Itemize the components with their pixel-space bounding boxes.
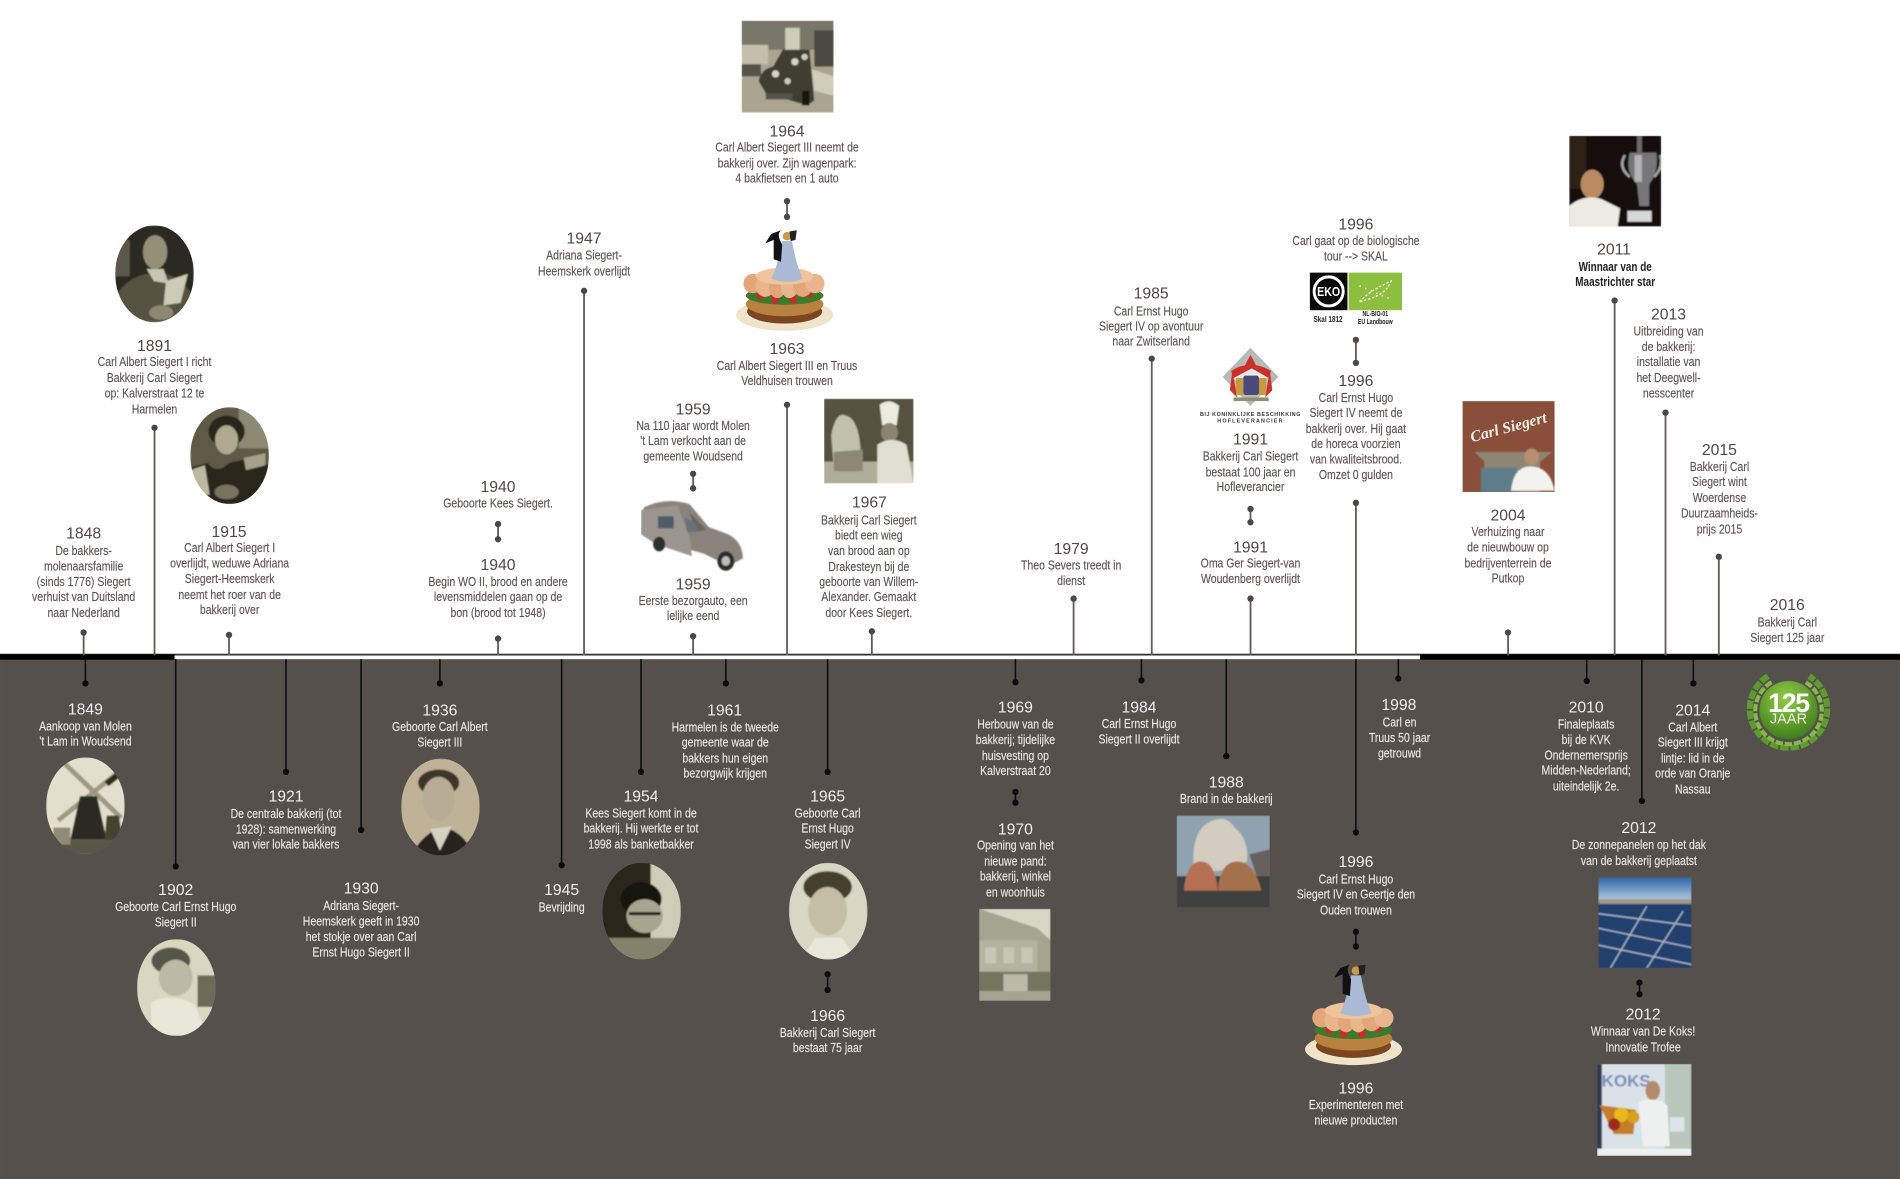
year 1902: 1902 xyxy=(158,882,193,899)
badge: 125 jaar xyxy=(1750,676,1827,748)
description 1930: Adriana Siegert- xyxy=(323,899,399,913)
description 1915: Siegert-Heemskerk xyxy=(185,572,275,586)
stem 2015 xyxy=(1716,554,1722,656)
portrait 1902 xyxy=(137,939,216,1036)
description 1998: Carl en xyxy=(1383,715,1416,729)
stem 1959 xyxy=(690,633,696,656)
year 1940: 1940 xyxy=(481,557,516,574)
stem 1996 xyxy=(1353,659,1359,836)
stem 1849 xyxy=(82,659,89,687)
description 1965: Geboorte Carl xyxy=(795,806,861,820)
stem 1961 xyxy=(723,659,729,687)
year 2012: 2012 xyxy=(1621,820,1656,837)
stem 1891 xyxy=(151,425,158,656)
year 1959: 1959 xyxy=(676,401,711,418)
event: 2013 xyxy=(1634,306,1704,656)
year 1965: 1965 xyxy=(810,789,845,806)
description 1963: Carl Albert Siegert III en Truus xyxy=(717,358,857,373)
laurel wreath xyxy=(1750,676,1827,748)
photo: bakery fire xyxy=(1176,816,1270,908)
description 1959: lelijke eend xyxy=(667,609,719,623)
caption: EU: NL-BIO-01 xyxy=(1363,310,1388,318)
year 2012: 2012 xyxy=(1626,1007,1661,1024)
description 1954: Kees Siegert komt in de xyxy=(585,806,697,820)
stem 2012 xyxy=(1639,659,1645,804)
icon: EU organic leaf xyxy=(1349,273,1402,310)
year 1991: 1991 xyxy=(1233,432,1268,449)
description 1945: Bevrijding xyxy=(539,900,585,914)
description 2010: uiteindelijk 2e. xyxy=(1553,779,1619,793)
stem 1936 xyxy=(437,659,443,687)
description 1940: levensmiddelen gaan op de xyxy=(434,590,562,604)
description 1915: neemt het roer van de xyxy=(178,587,281,602)
year 1996: 1996 xyxy=(1338,854,1374,871)
stem 2010 xyxy=(1584,659,1590,684)
description 1965: Ernst Hugo xyxy=(801,821,854,835)
year 1963: 1963 xyxy=(770,341,805,358)
year 1945: 1945 xyxy=(544,882,579,899)
description 1991: Oma Ger Siegert-van xyxy=(1201,556,1300,570)
portrait 1915 xyxy=(190,407,269,504)
year 1891: 1891 xyxy=(137,338,172,355)
year 1940: 1940 xyxy=(481,479,516,496)
description 1947: Adriana Siegert- xyxy=(546,248,622,262)
description 1969: Kalverstraat 20 xyxy=(980,764,1051,778)
description 2015: Woerdense xyxy=(1693,490,1746,505)
year 1985: 1985 xyxy=(1134,286,1169,303)
year 1936: 1936 xyxy=(422,703,458,720)
description 1996: Carl Ernst Hugo xyxy=(1319,872,1393,886)
connector 1959 xyxy=(690,471,696,491)
year 1991: 1991 xyxy=(1233,540,1268,557)
description 1961: bakkers hun eigen xyxy=(682,751,768,765)
event: 1970 xyxy=(977,821,1055,1001)
description 2013: Uitbreiding van xyxy=(1634,324,1704,338)
event: 2011 xyxy=(1569,136,1661,656)
green disc xyxy=(1759,681,1818,739)
photo: Koks trophy xyxy=(1597,1064,1692,1156)
caption: royal warrant: BIJ KONINKLIJKE BESCHIKKING xyxy=(1200,412,1301,418)
year 1921: 1921 xyxy=(268,789,304,806)
icon: royal crest xyxy=(1223,348,1278,406)
stem 1985 xyxy=(1149,356,1155,656)
description 1967: Drakesteyn bij de xyxy=(828,560,909,574)
photo: new building sign: Carl Siegert xyxy=(1469,409,1549,446)
description 1985: Siegert IV op avontuur xyxy=(1099,319,1203,333)
event: 1979 xyxy=(1021,541,1121,656)
portrait 1965 xyxy=(788,862,868,960)
description 2013: het Deegwell- xyxy=(1636,370,1701,385)
description 1984: Carl Ernst Hugo xyxy=(1102,716,1176,731)
event: 1848 xyxy=(32,526,135,656)
description 1991: Bakkerij Carl Siegert xyxy=(1203,449,1299,463)
year 1967: 1967 xyxy=(852,495,887,512)
stem 1963 xyxy=(784,402,790,656)
caption: EU: EU Landbouw xyxy=(1358,318,1393,326)
photo: baker with cradle xyxy=(824,398,914,484)
description 1991: Woudenberg overlijdt xyxy=(1201,572,1301,586)
description 1891: Bakkerij Carl Siegert xyxy=(107,370,203,385)
stem 1967 xyxy=(869,628,875,656)
stem 2013 xyxy=(1662,409,1669,656)
description 1891: op: Kalverstraat 12 te xyxy=(105,386,204,400)
icon: EKO logo: EKO xyxy=(1317,284,1340,299)
event: 1921 xyxy=(231,659,342,851)
description 1954: 1998 als banketbakker xyxy=(588,837,694,851)
description 2014: Siegert III krijgt xyxy=(1658,735,1728,749)
icon: wedding cake bread xyxy=(736,230,833,331)
description 2004: Verhuizing naar xyxy=(1472,524,1545,539)
stem 2014 xyxy=(1690,659,1697,687)
description 1979: dienst xyxy=(1057,573,1086,588)
event: 1936 xyxy=(392,659,488,855)
photo: chef with trophy xyxy=(1569,136,1662,227)
connector 1940 xyxy=(495,521,501,542)
connector 1996 xyxy=(1353,337,1359,366)
event: 1996 experiment xyxy=(1305,965,1404,1127)
stem 1848 xyxy=(80,629,87,656)
event: 2004 xyxy=(1463,401,1555,656)
description 1969: huisvesting op xyxy=(982,749,1049,763)
description 2010: bij de KVK xyxy=(1562,733,1611,747)
event: 1947 xyxy=(538,231,631,656)
description 1961: Harmelen is de tweede xyxy=(672,720,779,734)
event: 1996 wedding xyxy=(1297,659,1415,950)
description 1848: verhuist van Duitsland xyxy=(32,590,135,604)
event: 2015 xyxy=(1681,442,1758,656)
year 2010: 2010 xyxy=(1569,700,1604,717)
description 1996: Siegert IV neemt de xyxy=(1310,406,1402,420)
description 2010: Midden-Nederland; xyxy=(1542,763,1631,777)
description 2011: Winnaar van de xyxy=(1579,261,1652,274)
description 1936: Siegert III xyxy=(417,735,462,749)
portrait: windmill xyxy=(46,757,125,854)
year 1996: 1996 xyxy=(1338,373,1374,390)
description 1964: bakkerij over. Zijn wagenpark: xyxy=(718,156,856,170)
year 2015: 2015 xyxy=(1702,442,1737,459)
year 1954: 1954 xyxy=(623,789,659,806)
description 1940: Begin WO II, brood en andere xyxy=(428,575,568,589)
description 1954: bakkerij. Hij werkte er tot xyxy=(584,821,699,835)
year 1969: 1969 xyxy=(998,700,1033,717)
description 2004: bedrijventerrein de xyxy=(1465,556,1551,570)
event: 1985 xyxy=(1099,286,1203,656)
event: 1996 overname xyxy=(1306,373,1407,656)
stem 1969 xyxy=(1012,659,1019,685)
description 1985: naar Zwitserland xyxy=(1112,334,1190,348)
dark lower band xyxy=(0,658,1900,1179)
photo: decorated car xyxy=(742,20,834,113)
description 2014: orde van Oranje xyxy=(1655,766,1730,780)
photo: new shop xyxy=(979,908,1050,1001)
year 1998: 1998 xyxy=(1381,697,1417,714)
year 1996: 1996 xyxy=(1338,217,1374,234)
description 1921: van vier lokale bakkers xyxy=(233,837,339,851)
stem 1954 xyxy=(638,659,644,775)
description 1930: het stokje over aan Carl xyxy=(306,930,417,944)
description 1970: Opening van het xyxy=(977,838,1055,852)
caption: hofleverancier: HOFLEVERANCIER xyxy=(1217,419,1284,425)
description 1979: Theo Severs treedt in xyxy=(1021,558,1121,572)
year 1964: 1964 xyxy=(770,123,805,140)
icon: EKO logo xyxy=(1310,273,1347,310)
description 1984: Siegert II overlijdt xyxy=(1099,732,1180,746)
event: 2010 xyxy=(1542,659,1631,793)
description 1996: tour --> SKAL xyxy=(1324,249,1388,263)
description 2014: Carl Albert xyxy=(1668,720,1718,734)
description 1996: Experimenteren met xyxy=(1309,1098,1404,1112)
photo: solar panels xyxy=(1598,877,1692,968)
connector 2012 xyxy=(1636,980,1643,997)
description 1967: biedt een wieg xyxy=(835,528,903,542)
stem 2004 xyxy=(1505,629,1511,656)
description 2016: Siegert 125 jaar xyxy=(1750,630,1824,645)
description 2015: Duurzaamheids- xyxy=(1681,506,1758,520)
event: 1915 xyxy=(170,407,290,656)
event: 1965 xyxy=(789,659,868,993)
event: 1966 xyxy=(780,1008,876,1055)
description 1961: gemeente waar de xyxy=(682,735,769,749)
description 1921: De centrale bakkerij (tot xyxy=(231,807,342,821)
description 1996: Omzet 0 gulden xyxy=(1319,467,1393,482)
year 1970: 1970 xyxy=(998,821,1033,838)
event: 1959 molen xyxy=(636,401,750,491)
event: 1967 xyxy=(819,399,918,656)
event: 1984 xyxy=(1099,659,1180,746)
description 1915: Carl Albert Siegert I xyxy=(184,541,275,555)
event: 1945 xyxy=(539,659,585,914)
event: 2012 Koks xyxy=(1591,1007,1695,1156)
description 1985: Carl Ernst Hugo xyxy=(1114,304,1188,318)
event: 1891 xyxy=(98,225,212,656)
event: 1963 xyxy=(717,230,857,656)
description 1967: door Kees Siegert. xyxy=(825,606,912,620)
description 1848: De bakkers- xyxy=(55,544,112,558)
description 2012: De zonnepanelen op het dak xyxy=(1572,838,1706,852)
description 2012: Winnaar van De Koks! xyxy=(1591,1024,1695,1038)
stem 1988 xyxy=(1223,659,1229,759)
event: 1940 WO II xyxy=(428,557,568,656)
stem 1915 xyxy=(226,632,232,656)
description 2015: Siegert wint xyxy=(1692,475,1748,489)
year 2004: 2004 xyxy=(1490,507,1526,524)
description 1998: getrouwd xyxy=(1378,746,1421,760)
description 2014: lintje: lid in de xyxy=(1661,751,1725,765)
year 2013: 2013 xyxy=(1651,306,1686,323)
year 1988: 1988 xyxy=(1209,775,1244,792)
description 1849: 't Lam in Woudsend xyxy=(39,734,132,748)
description 1996: Ouden trouwen xyxy=(1320,903,1392,917)
year 2011: 2011 xyxy=(1597,241,1631,258)
description 2004: Putkop xyxy=(1492,571,1524,585)
description 1902: Siegert II xyxy=(155,915,197,929)
event: 1964 xyxy=(715,21,859,220)
year 1947: 1947 xyxy=(567,231,602,248)
event: 1991 hofleverancier xyxy=(1200,348,1301,525)
description 1959: Na 110 jaar wordt Molen xyxy=(636,418,750,433)
stem 1940 xyxy=(495,635,501,656)
description 2015: Bakkerij Carl xyxy=(1690,460,1749,474)
stem 1984 xyxy=(1138,659,1145,684)
description 1966: bestaat 75 jaar xyxy=(793,1041,862,1055)
event: 1902 xyxy=(115,659,236,1036)
description 1940: Geboorte Kees Siegert. xyxy=(443,496,553,510)
description 1915: bakkerij over xyxy=(200,603,259,617)
description 1967: Bakkerij Carl Siegert xyxy=(821,513,917,527)
description 1969: bakkerij; tijdelijke xyxy=(976,733,1055,747)
year 1930: 1930 xyxy=(344,881,379,898)
description 1891: Harmelen xyxy=(132,402,177,416)
description 1964: Carl Albert Siegert III neemt de xyxy=(715,140,859,154)
description 1996: de horeca voorzien xyxy=(1311,437,1401,451)
description 1969: Herbouw van de xyxy=(977,717,1054,731)
year 2014: 2014 xyxy=(1675,703,1711,720)
description 1965: Siegert IV xyxy=(805,837,851,851)
description 1970: bakkerij, winkel xyxy=(980,869,1051,883)
description 1996: Carl Ernst Hugo xyxy=(1319,390,1393,405)
connector 1965 xyxy=(824,971,831,993)
stem 1921 xyxy=(283,659,289,775)
event: 2012 solar xyxy=(1572,659,1706,997)
description 2015: prijs 2015 xyxy=(1697,522,1742,536)
description 1988: Brand in de bakkerij xyxy=(1180,792,1273,806)
year 1848: 1848 xyxy=(66,526,101,543)
year 1915: 1915 xyxy=(212,524,247,541)
event: 1996 SKAL xyxy=(1292,217,1419,366)
year 2016: 2016 xyxy=(1770,597,1805,614)
description 1970: nieuwe pand: xyxy=(984,854,1047,868)
year 1996: 1996 xyxy=(1338,1081,1374,1098)
description 2011: Maastrichter star xyxy=(1575,276,1656,289)
connector 1996 xyxy=(1353,929,1359,950)
year 1961: 1961 xyxy=(707,703,742,720)
description 2012: van de bakkerij geplaatst xyxy=(1581,853,1698,868)
event: 1930 xyxy=(303,659,420,959)
description 1963: Veldhuisen trouwen xyxy=(741,374,833,388)
timeline axis xyxy=(0,654,1900,660)
description 1902: Geboorte Carl Ernst Hugo xyxy=(115,899,236,914)
description 1849: Aankoop van Molen xyxy=(39,719,132,733)
description 1921: 1928): samenwerking xyxy=(236,822,336,836)
year 1966: 1966 xyxy=(810,1008,845,1025)
icon: wedding cake bread xyxy=(1305,965,1402,1065)
description 1959: 't Lam verkocht aan de xyxy=(640,433,746,448)
description 1848: (sinds 1776) Siegert xyxy=(37,575,131,589)
event: 1954 xyxy=(584,659,699,960)
description 1940: bon (brood tot 1948) xyxy=(450,606,546,620)
stem 1945 xyxy=(558,659,565,868)
description 1891: Carl Albert Siegert I richt xyxy=(98,355,212,369)
event: 1988 xyxy=(1177,659,1273,908)
event: 2016 xyxy=(1750,597,1824,645)
description 1959: Eerste bezorgauto, een xyxy=(639,593,748,608)
event: 1969 xyxy=(976,659,1055,806)
photo: Koks trophy: KOKS xyxy=(1602,1071,1651,1090)
portrait 1954 xyxy=(602,862,681,960)
description 1966: Bakkerij Carl Siegert xyxy=(780,1025,876,1040)
year 1849: 1849 xyxy=(68,701,103,718)
description 1991: Hofleverancier xyxy=(1217,480,1284,494)
year 1959: 1959 xyxy=(676,577,711,594)
caption: Skal: Skal 1812 xyxy=(1313,314,1343,324)
year 1979: 1979 xyxy=(1054,541,1089,558)
description 2013: installatie van xyxy=(1637,355,1700,369)
stem 1979 xyxy=(1070,595,1077,656)
stem 1996 xyxy=(1353,500,1359,656)
stem 1930 xyxy=(358,659,364,833)
stem 2011 xyxy=(1611,297,1618,656)
description 1848: molenaarsfamilie xyxy=(44,559,123,573)
description 1947: Heemskerk overlijdt xyxy=(538,264,631,278)
description 1996: nieuwe producten xyxy=(1315,1113,1397,1127)
description 2013: de bakkerij: xyxy=(1642,340,1695,354)
lower events xyxy=(39,659,1730,1156)
stem 1991 xyxy=(1247,595,1254,656)
photo: new building sign xyxy=(1462,401,1555,492)
description 2014: Nassau xyxy=(1675,782,1711,796)
event: 1991 overlijden xyxy=(1201,540,1301,656)
portrait 1891 xyxy=(115,225,194,322)
year 1984: 1984 xyxy=(1122,700,1157,717)
description 1996: Carl gaat op de biologische xyxy=(1292,234,1419,248)
stem 1998 xyxy=(1395,659,1401,682)
description 2004: de nieuwbouw op xyxy=(1467,540,1549,554)
description 1996: van kwaliteitsbrood. xyxy=(1310,452,1402,466)
description 1930: Heemskerk geeft in 1930 xyxy=(303,914,420,928)
event: 1959 bezorgauto xyxy=(639,501,748,656)
description 1967: geboorte van Willem- xyxy=(819,575,918,589)
stem 1902 xyxy=(173,659,179,870)
description 1959: gemeente Woudsend xyxy=(643,449,743,463)
description 1970: en woonhuis xyxy=(986,885,1045,899)
connector 1964 xyxy=(784,198,790,220)
event: 2014 xyxy=(1655,659,1730,796)
description 1936: Geboorte Carl Albert xyxy=(392,719,488,734)
description 1964: 4 bakfietsen en 1 auto xyxy=(735,171,839,185)
badge label: JAAR xyxy=(1770,712,1807,728)
connector 1991 xyxy=(1247,506,1254,525)
event: 1998 xyxy=(1369,659,1430,760)
description 2016: Bakkerij Carl xyxy=(1758,615,1817,629)
description 1967: van brood aan op xyxy=(828,544,910,558)
connector 1969 xyxy=(1012,789,1019,806)
description 2010: Finaleplaats xyxy=(1558,717,1615,731)
description 1996: bakkerij over. Hij gaat xyxy=(1306,421,1407,436)
description 2010: Ondernemersprijs xyxy=(1544,748,1628,762)
stem 1965 xyxy=(824,659,831,775)
description 1930: Ernst Hugo Siegert II xyxy=(312,945,410,959)
event: 1849 xyxy=(39,659,132,854)
description 2012: Innovatie Trofee xyxy=(1605,1040,1681,1054)
event: 1940 birth Kees xyxy=(443,479,553,542)
description 2013: nesscenter xyxy=(1643,386,1694,400)
description 1967: Alexander. Gemaakt xyxy=(821,590,917,604)
description 1998: Truus 50 jaar xyxy=(1369,730,1430,745)
event: 1961 xyxy=(672,659,779,780)
portrait 1936 xyxy=(401,758,480,856)
description 1915: overlijdt, weduwe Adriana xyxy=(170,556,290,570)
description 1848: naar Nederland xyxy=(47,606,120,620)
description 1996: Siegert IV en Geertje den xyxy=(1297,887,1415,901)
badge number: 125 xyxy=(1768,688,1810,718)
icon: delivery van xyxy=(641,500,744,572)
description 1991: bestaat 100 jaar en xyxy=(1206,465,1295,479)
description 1961: bezorgwijk krijgen xyxy=(684,766,767,780)
stem 1947 xyxy=(581,288,587,656)
